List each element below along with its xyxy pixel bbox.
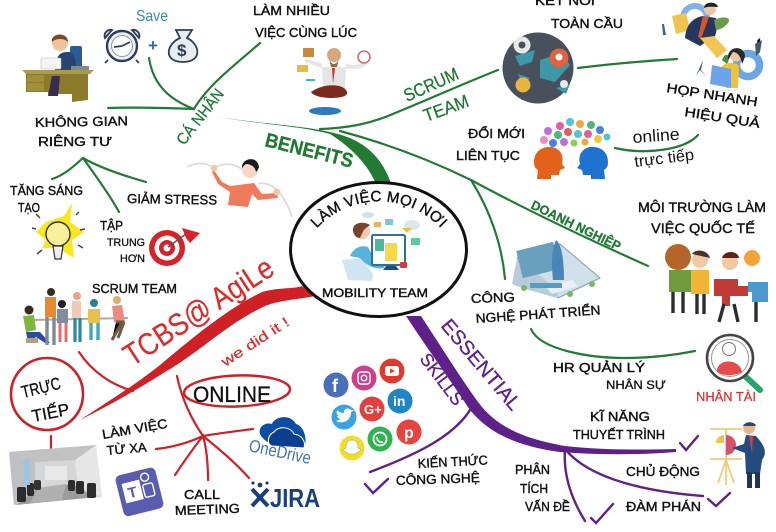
center title: LÀM VIỆC MỌI NƠI <box>310 189 448 228</box>
label: essential skills: SKILLS <box>416 349 468 409</box>
icon: magnifier talent <box>707 335 760 390</box>
circle: truc tiep: TIẾP <box>30 400 71 426</box>
icon: globe <box>502 32 574 104</box>
icon: whatsapp <box>368 426 392 452</box>
icon: onedrive: OneDrive <box>247 435 313 468</box>
text: chu dong: CHỦ ĐỘNG <box>626 464 700 479</box>
text: lam nhieu viec cung luc: LÀM NHIỀU <box>253 3 330 18</box>
purple branches: essential skills <box>365 316 730 523</box>
label: scrum team right: SCRUM <box>400 64 462 106</box>
text: moi truong lam viec quoc te <box>638 199 766 236</box>
icon: linkedin: in <box>393 393 405 409</box>
text: truc tiep: trực tiếp <box>633 147 695 171</box>
icon: snapchat <box>340 436 364 460</box>
text: hop nhanh hieu qua <box>666 80 761 131</box>
text: phan tich van de <box>515 462 570 514</box>
icon: money bag: $ <box>177 41 187 60</box>
text: tang sang tao <box>10 183 83 215</box>
text: tap trung hon: HƠN <box>120 253 145 265</box>
text: nhan tai: NHÂN TÀI <box>696 389 756 404</box>
text: hr quan ly nhan su: NHÂN SỰ <box>606 377 666 392</box>
label: tcbs agile: TCBS@ AgiLe <box>117 250 280 373</box>
label: scrum team right <box>400 64 472 126</box>
text: hop nhanh hieu qua: HIỆU QUẢ <box>684 104 761 131</box>
text: moi truong lam viec quoc te: MÔI TRƯỜNG LÀM <box>638 199 766 215</box>
icon: person at computer <box>342 212 420 281</box>
red branches: TCBS Agile <box>51 286 315 480</box>
text: scrum team left: SCRUM TEAM <box>92 281 177 296</box>
text: khong gian rieng tu: KHÔNG GIAN <box>35 113 128 130</box>
text: ki nang thuyet trinh <box>573 409 665 442</box>
label: we did it: we did it ! <box>217 314 292 370</box>
central circle <box>289 181 468 318</box>
text: ki nang thuyet trinh: KĨ NĂNG <box>590 409 650 424</box>
text: kien thuc cong nghe <box>396 452 488 488</box>
icon: jira logo <box>251 481 320 513</box>
text: call meeting: CALL <box>184 487 220 502</box>
text: kien thuc cong nghe: CÔNG NGHỆ <box>396 470 480 488</box>
text: tang sang tao: TĂNG SÁNG <box>10 183 83 198</box>
text: dam phan: ĐÀM PHÁN <box>626 499 701 514</box>
text: lam nhieu viec cung luc <box>253 3 357 40</box>
text: save: Save <box>136 8 168 25</box>
label: benefits: BENEFITS <box>263 130 355 173</box>
icon: puzzle team <box>665 244 768 322</box>
text: doi moi lien tuc <box>456 126 525 163</box>
label: essential skills: ESSENTIAL <box>436 315 525 415</box>
center subtitle: MOBILITY TEAM <box>322 286 428 300</box>
text: tang sang tao: TẠO <box>18 200 40 215</box>
oval: online: ONLINE <box>193 382 271 407</box>
icon: microsoft teams: T <box>126 484 139 502</box>
text: cong nghe phat trien: NGHỆ PHÁT TRIỂN <box>475 302 601 326</box>
text: tap trung hon <box>100 218 145 265</box>
icon: pinterest: p <box>404 425 414 442</box>
text: kien thuc cong nghe: KIẾN THỨC <box>417 452 488 471</box>
text: hop nhanh hieu qua: HỌP NHANH <box>666 80 759 109</box>
text: ket noi toan cau: TOÀN CẦU <box>551 16 623 31</box>
icon: meeting people <box>662 3 762 92</box>
icon: light bulb <box>32 203 85 259</box>
text: doi moi lien tuc: ĐỔI MỚI <box>468 126 525 141</box>
text: lam viec tu xa <box>101 416 169 458</box>
text: call meeting <box>175 487 240 518</box>
icon: facebook: f <box>332 376 339 396</box>
icon: presenter <box>710 422 765 488</box>
icon: meeting room <box>9 445 102 505</box>
text: phan tich van de: PHÂN <box>515 462 550 477</box>
text: doi moi lien tuc: LIÊN TỤC <box>456 148 520 163</box>
icon: youtube <box>380 358 404 384</box>
text: hr quan ly nhan su <box>553 360 666 392</box>
text: tap trung hon: TRUNG <box>107 237 145 249</box>
icon: alarm clock <box>105 30 139 63</box>
text: tap trung hon: TẬP <box>100 218 123 233</box>
icon: onedrive <box>247 417 313 468</box>
text: khong gian rieng tu: RIÊNG TƯ <box>38 134 112 149</box>
icon: money bag <box>169 30 197 62</box>
icon: plus: + <box>148 36 158 55</box>
text: phan tich van de: TÍCH <box>520 481 548 496</box>
text: lam viec tu xa: LÀM VIỆC <box>101 416 169 442</box>
label: ca nhan: CÁ NHÂN <box>172 85 228 148</box>
icon: google plus: G+ <box>364 402 382 417</box>
social icons <box>324 358 422 460</box>
text: call meeting: MEETING <box>175 501 240 518</box>
text: ket noi toan cau <box>535 0 623 31</box>
icon: instagram <box>352 366 376 390</box>
icon: brains with ideas <box>534 118 610 179</box>
icon: jira logo: JIRA <box>270 483 320 513</box>
circle: truc tiep <box>11 358 83 430</box>
text: phan tich van de: VẤN ĐỀ <box>525 499 570 514</box>
icon: microsoft teams <box>115 467 164 517</box>
text: ki nang thuyet trinh: THUYẾT TRÌNH <box>573 427 665 442</box>
text: giam stress: GIẢM STRESS <box>127 191 218 208</box>
text: hr quan ly nhan su: HR QUẢN LÝ <box>553 360 645 375</box>
text: online: online <box>632 125 680 147</box>
label: doanh nghiep: DOANH NGHIỆP <box>529 197 624 254</box>
circle: truc tiep: TRỰC <box>19 374 63 402</box>
icon: target <box>149 228 200 266</box>
text: cong nghe phat trien <box>471 289 601 326</box>
text: moi truong lam viec quoc te: VIỆC QUỐC TẾ <box>651 219 755 236</box>
icon: tech laptop rocket <box>512 240 600 298</box>
text: lam nhieu viec cung luc: VIỆC CÙNG LÚC <box>255 25 357 40</box>
label: scrum team right: TEAM <box>421 91 472 126</box>
icon: scrum team people <box>23 288 128 345</box>
icon: twitter <box>332 404 356 430</box>
oval: online <box>183 374 291 408</box>
text: lam viec tu xa: TỪ XA <box>106 440 147 458</box>
icon: relaxing person <box>187 159 292 217</box>
icon: meditating man <box>297 48 370 115</box>
icon: man at desk <box>22 34 94 102</box>
text: khong gian rieng tu <box>35 113 128 149</box>
green branches: benefits <box>52 43 698 358</box>
text: cong nghe phat trien: CÔNG <box>471 289 515 306</box>
